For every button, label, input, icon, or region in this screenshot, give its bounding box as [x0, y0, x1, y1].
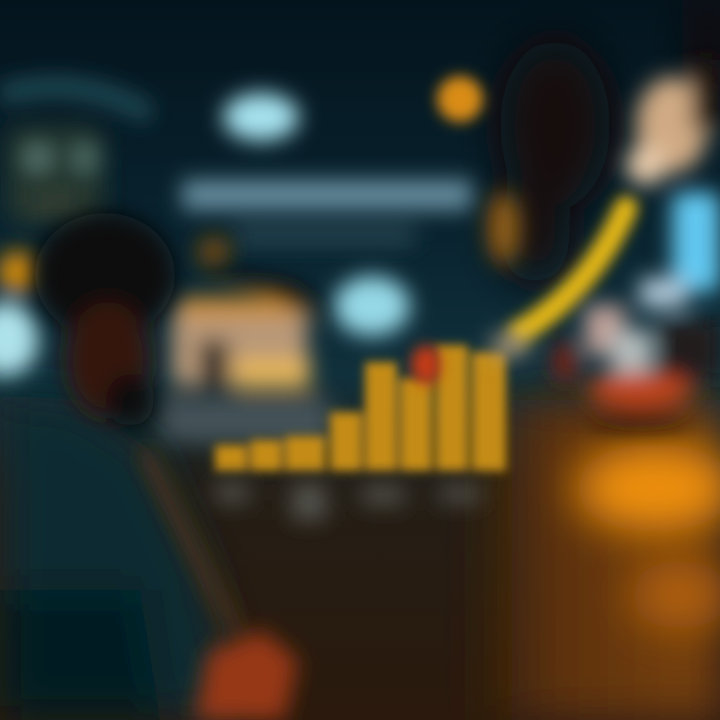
bar 7	[436, 345, 468, 471]
bar 2	[250, 440, 282, 471]
orange dot icon	[437, 76, 483, 122]
yellow trend arrow	[520, 208, 626, 332]
bar chart	[215, 345, 506, 471]
person head	[35, 213, 175, 426]
floor highlight lower	[630, 561, 720, 629]
orange side item	[488, 192, 520, 264]
left amber and blue dots	[0, 236, 230, 378]
foreground person silhouette	[0, 213, 298, 720]
dark silhouette upper right	[500, 0, 720, 285]
person body	[0, 395, 245, 720]
character on right	[490, 60, 720, 428]
bar 5	[365, 362, 397, 471]
red marker on chart	[411, 345, 441, 385]
bar 8	[472, 352, 506, 471]
card with orange top	[160, 268, 330, 442]
bar 3	[285, 436, 325, 471]
bar 6	[400, 378, 432, 471]
heading text band	[182, 180, 472, 244]
bar 1	[215, 445, 247, 471]
top blue badge	[223, 93, 299, 141]
mid blue badge	[334, 276, 410, 336]
floor glow	[470, 400, 720, 720]
left wifi-like icon	[0, 87, 150, 225]
bar 4	[330, 412, 362, 471]
axis labels	[215, 484, 480, 520]
floor highlight upper	[575, 444, 720, 532]
person arm	[145, 450, 298, 720]
